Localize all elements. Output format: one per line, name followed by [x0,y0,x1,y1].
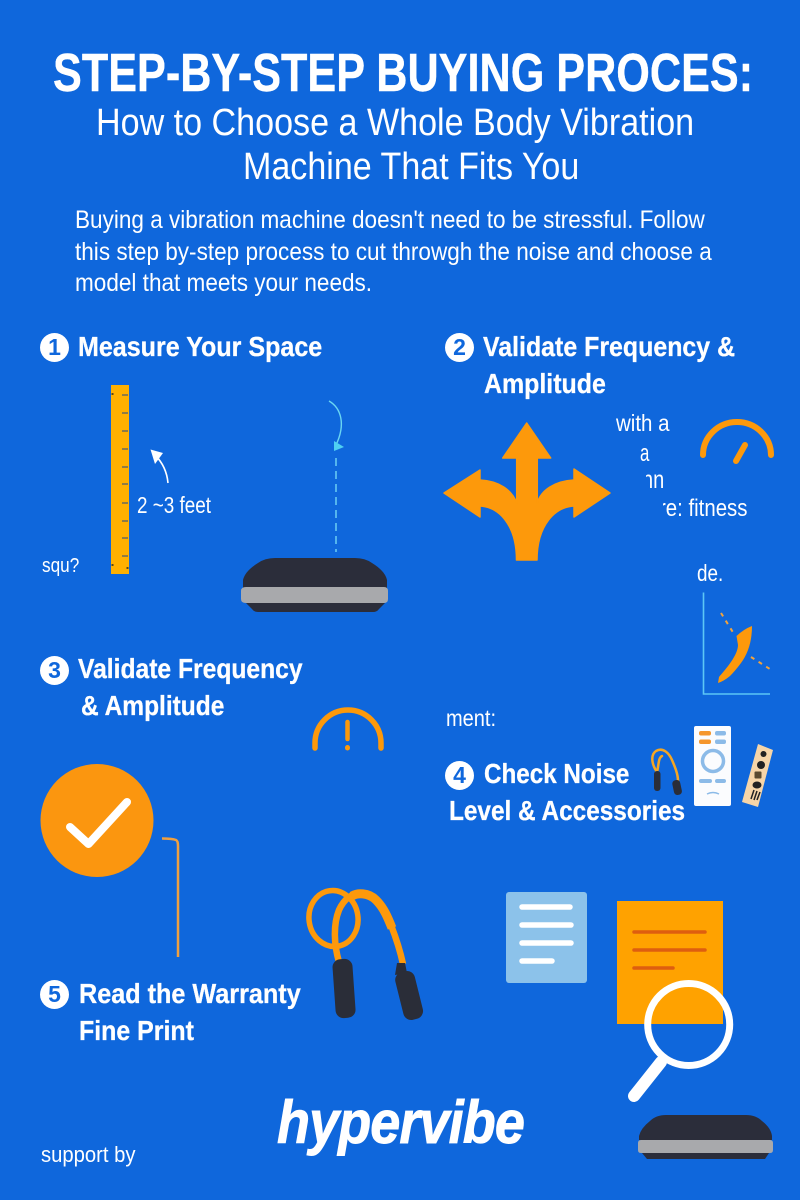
step 5 heading: Read the Warranty [79,978,301,1009]
intro text: Buying a vibration machine doesn't need to be stressful. Follow [75,206,705,234]
fragment text: a: a [640,440,649,467]
fragment text: 2-3 feet: 2 ~3 feet [137,492,211,518]
connector line [162,838,178,957]
icon: ruler [111,385,129,574]
fragment text: with a: with a [616,410,669,436]
step 4 heading: Check Noise [484,758,629,789]
step 5 heading: 5 [48,981,61,1007]
step 1 heading: Measure Your Space [78,331,322,362]
intro text: this step by-step process to cut throwgh the noise and choose a [75,238,712,266]
arrow: cyan curved [329,401,344,552]
icon: three-way arrows [444,423,610,560]
step 4 heading [445,758,685,826]
step 3 heading: & Amplitude [81,690,224,721]
icon: remote white [694,726,731,806]
title: STEP-BY-STEP BUYING PROCES: [53,43,753,103]
icon: vibration machine 2 [638,1115,773,1159]
support by: support by [41,1142,136,1167]
icon: jump rope small [652,750,683,796]
step 5 heading: Fine Print [79,1015,194,1046]
subtitle: How to Choose a Whole Body Vibration [96,102,694,144]
hypervibe logo: hypervibe [277,1089,524,1156]
step 5 heading [40,978,301,1046]
icon: gauge top [703,422,771,461]
intro text [75,206,712,297]
arrow: measure up [150,450,168,483]
subtitle: Machine That Fits You [243,146,579,188]
icon: magnifying glass [634,984,730,1096]
step 3 heading: Validate Frequency [78,653,303,684]
step 2 heading: 2 [453,334,466,360]
step 3 heading: 3 [48,657,61,683]
chart: amplitude curve [704,592,773,694]
icon: checkmark circle [40,764,154,877]
icon: remote beige [742,744,773,807]
icon: jump rope large [305,887,425,1022]
subtitle [96,102,694,188]
step 4 heading: 4 [453,762,466,788]
intro text: model that meets your needs. [75,269,372,297]
fragment text: de.: de. [697,560,723,586]
icon: orange document [617,901,723,1024]
fragment text: squ: squ? [42,555,79,577]
step 2 heading [445,331,735,400]
icon: blue document [506,892,587,983]
fragment text: ment: ment: [446,705,496,731]
step 4 heading: Level & Accessories [449,795,685,826]
step 1 heading: 1 [48,334,61,360]
icon: warning gauge [315,710,381,748]
step 2 heading: Validate Frequency & [483,331,735,362]
step 3 heading [40,653,303,722]
icon: vibration machine 1 [241,558,388,612]
step 2 heading: Amplitude [484,368,606,399]
